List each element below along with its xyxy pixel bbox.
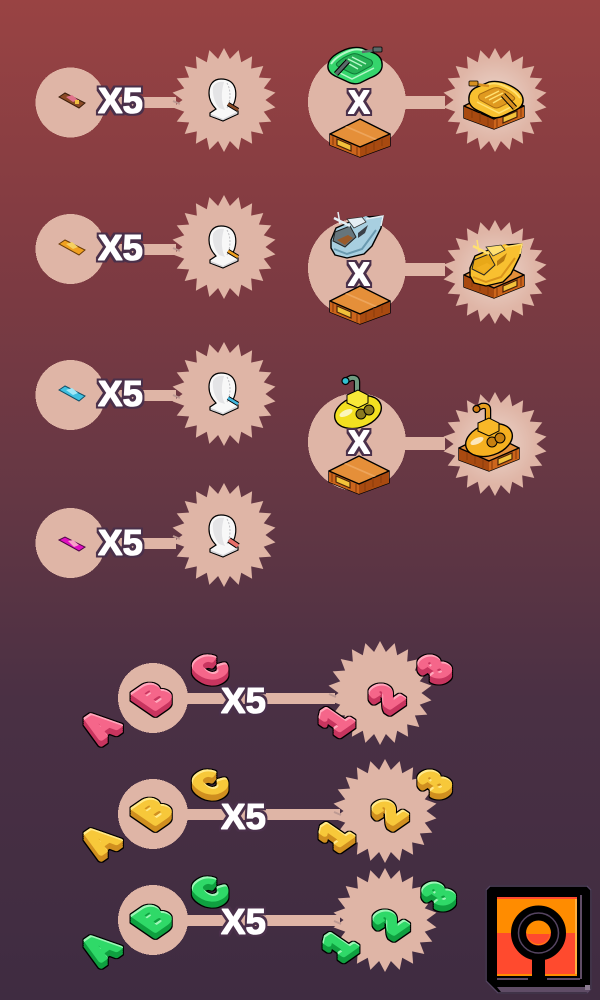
- recipe: pink letters to pink numbers: [72, 641, 461, 745]
- icon: orange ticket: [59, 240, 85, 255]
- icon: crate: [330, 286, 390, 324]
- icon: orange game badge: [485, 885, 592, 994]
- icon: gold yacht: [470, 240, 522, 286]
- icon: blue yacht: [331, 212, 383, 258]
- recipe row: orange ticket to bust: [36, 195, 276, 299]
- recipe: yacht plus crate to gold yacht: [308, 212, 547, 324]
- burst: [333, 759, 437, 863]
- recipe: submarine plus crate to gold submarine: [308, 378, 547, 496]
- burst: [443, 220, 547, 324]
- recipe row: brown ticket to bust: [36, 48, 276, 152]
- x5 label: X5: [98, 227, 143, 268]
- burst with bust: [172, 483, 276, 587]
- recipe: green raft plus crate to gold raft: [308, 47, 547, 157]
- burst: [443, 48, 547, 152]
- recipe row: blue ticket to bust: [36, 342, 276, 446]
- letter B: B: [125, 676, 181, 715]
- burst with bust: [172, 195, 276, 299]
- multiply sign: X: [348, 84, 370, 120]
- letter C: C: [182, 648, 238, 687]
- number 3: 3: [413, 876, 465, 911]
- number 3: 3: [409, 649, 461, 684]
- icon: gold crate: [464, 260, 524, 298]
- icon: blue ticket: [59, 386, 85, 401]
- number 2: 2: [360, 678, 412, 713]
- icon: crate: [330, 119, 390, 157]
- multiply sign: X: [348, 256, 370, 292]
- letter C: C: [182, 763, 238, 802]
- x5 label: X5: [221, 680, 266, 721]
- icon: gold crate: [464, 91, 524, 129]
- icon: yellow submarine: [330, 378, 386, 434]
- icon: crate: [329, 456, 389, 494]
- x5 label: X5: [221, 796, 266, 837]
- icon: gold raft: [469, 81, 523, 118]
- icon: gold submarine: [461, 406, 517, 462]
- icon: gold crate: [459, 433, 519, 471]
- number 2: 2: [363, 794, 415, 829]
- x5 label: X5: [98, 373, 143, 414]
- letter A: A: [72, 705, 128, 744]
- x5 label: X5: [98, 522, 143, 563]
- recipe row: magenta ticket to bust: [36, 483, 276, 587]
- burst: [333, 868, 437, 972]
- x5 label: X5: [98, 80, 143, 121]
- icon: brown ticket: [59, 93, 85, 108]
- number 1: 1: [309, 816, 361, 851]
- letter A: A: [72, 820, 128, 859]
- number 3: 3: [409, 764, 461, 799]
- burst: [328, 641, 432, 745]
- burst with bust: [172, 48, 276, 152]
- icon: green raft: [328, 47, 382, 84]
- number 1: 1: [309, 701, 361, 736]
- number 1: 1: [313, 926, 365, 961]
- x5 label: X5: [221, 901, 266, 942]
- burst: [443, 392, 547, 496]
- letter B: B: [125, 791, 181, 830]
- icon: magenta ticket: [59, 537, 85, 551]
- letter A: A: [72, 927, 128, 966]
- number 2: 2: [364, 904, 416, 939]
- recipe: yellow letters to yellow numbers: [72, 759, 461, 863]
- letter B: B: [125, 898, 181, 937]
- burst with bust: [172, 342, 276, 446]
- recipe: green letters to green numbers: [72, 868, 465, 972]
- letter C: C: [182, 870, 238, 909]
- multiply sign: X: [348, 424, 370, 460]
